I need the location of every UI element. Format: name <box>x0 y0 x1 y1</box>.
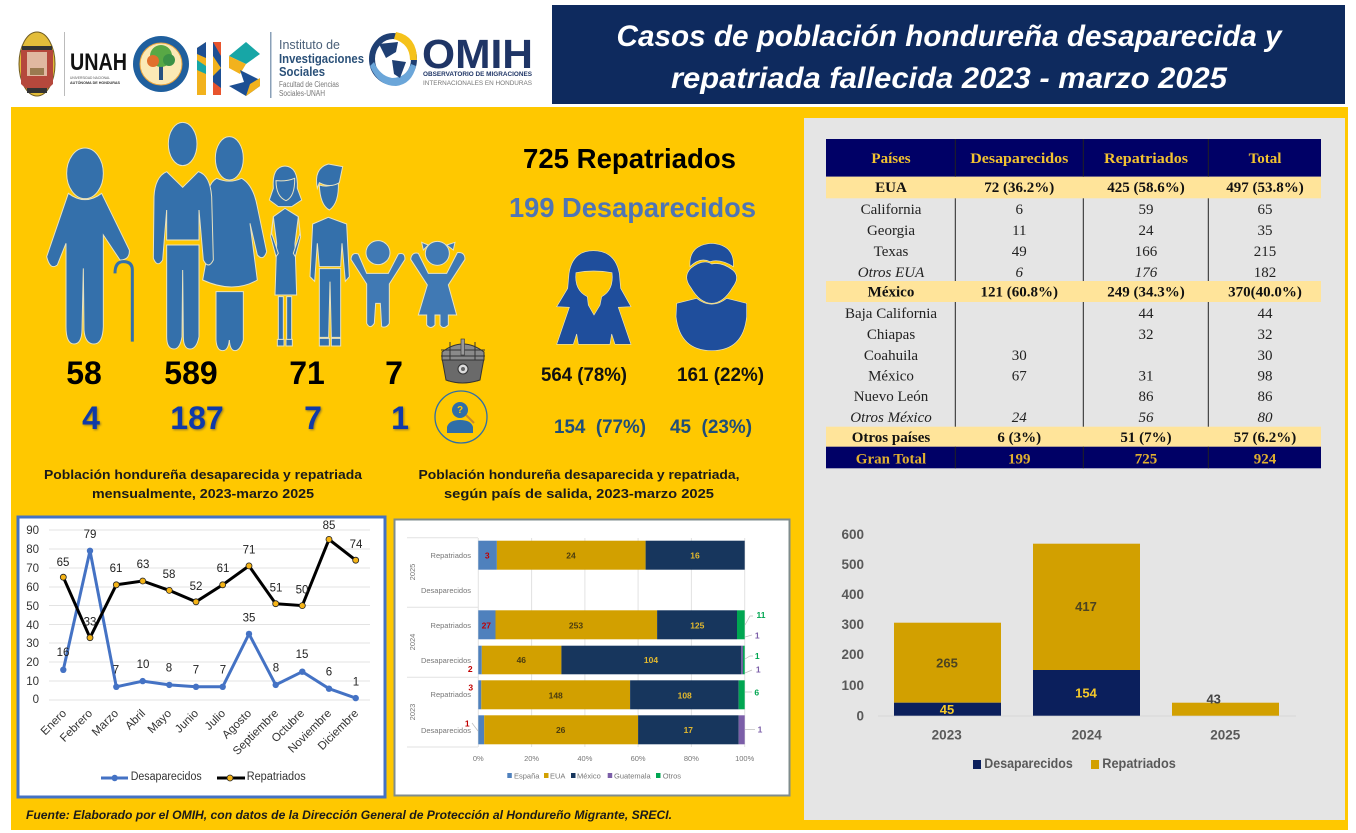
figures: repatriated by sex <box>541 365 764 386</box>
data labels: 10 <box>137 659 149 671</box>
column values: 265 <box>936 656 958 670</box>
rows: US states: Georgia <box>867 223 915 239</box>
legend: Desaparecidos <box>131 771 202 783</box>
rows: US states: 65 <box>1258 202 1272 218</box>
icon: missing person search <box>435 391 487 443</box>
logo: UNAH wordmark: UNAH <box>70 49 127 76</box>
stacked column chart: by year <box>841 527 1296 771</box>
data labels: 8 <box>273 662 279 674</box>
logo: UNAH wordmark: AUTÓNOMA DE HONDURAS <box>70 80 120 85</box>
y axis labels: 600 <box>841 527 864 542</box>
value labels: 26 <box>556 725 566 735</box>
data labels: 8 <box>166 662 172 674</box>
month labels: Mayo <box>146 708 174 736</box>
stacked bar chart: country of departure <box>394 520 790 796</box>
data labels: 6 <box>326 666 332 678</box>
rows: Mexican states: 44 <box>1258 306 1273 322</box>
rows: US states: 166 <box>1135 244 1158 260</box>
series: repatriated <box>60 536 359 641</box>
icon: young woman <box>269 166 302 346</box>
rows: US states: 176 <box>1135 265 1158 281</box>
legend: Otros <box>663 772 681 780</box>
value labels: 16 <box>690 551 700 561</box>
table header: Desaparecidos <box>970 151 1068 167</box>
legend: Guatemala <box>614 772 652 780</box>
line chart: monthly cases <box>18 517 385 797</box>
row: Otros países: 51 (7%) <box>1120 430 1172 446</box>
year labels <box>408 564 417 720</box>
y axis labels: 0 <box>33 694 39 706</box>
column: 2024 <box>1033 544 1140 716</box>
table header <box>871 151 1281 167</box>
panel: gray right panel <box>804 118 1345 820</box>
rows: US states: 24 <box>1138 223 1154 239</box>
title: repatriada fallecida 2023 - marzo 2025 <box>671 62 1228 95</box>
y axis labels: 300 <box>841 617 864 632</box>
row: México: 121 (60.8%) <box>981 284 1058 300</box>
y axis labels: 400 <box>841 587 864 602</box>
heading: monthly chart: Población hondureña desaparecida y repatriada <box>44 468 363 482</box>
data labels: 52 <box>190 581 202 593</box>
data labels: 58 <box>163 569 175 581</box>
bar: desaparecidos 2023 <box>478 715 745 744</box>
rows: US states: 49 <box>1012 244 1027 260</box>
row: EUA <box>875 180 1304 196</box>
icon: young man <box>310 164 349 346</box>
x axis labels <box>932 728 1241 742</box>
percent axis: 60% <box>631 754 646 763</box>
logo: IIS <box>197 42 260 96</box>
y axis labels: 50 <box>26 601 39 613</box>
heading: monthly chart <box>44 468 363 501</box>
logo: Instituto de Investigaciones Sociales <box>279 38 364 98</box>
data labels: 74 <box>350 539 363 551</box>
y axis labels <box>841 527 864 724</box>
icon: woman <box>557 251 631 344</box>
logo: OMIH globe <box>370 32 417 86</box>
category labels: Desaparecidos <box>421 656 471 665</box>
y axis labels: 90 <box>26 525 39 537</box>
icon: adult man <box>153 122 213 349</box>
column: 2023 <box>894 623 1001 716</box>
table header: Repatriados <box>1104 151 1188 167</box>
legend: Repatriados <box>247 771 306 783</box>
value labels: 1 <box>465 719 470 729</box>
category labels: Repatriados <box>431 690 471 699</box>
percent axis <box>473 754 755 763</box>
row: México <box>868 284 1302 300</box>
row: Otros países: 6 (3%) <box>997 430 1041 446</box>
rows: Mexican states: 32 <box>1258 327 1272 343</box>
logo: Instituto de Investigaciones Sociales: Instituto de <box>279 38 340 52</box>
month labels: Abril <box>123 708 148 732</box>
row: México: 370(40.0%) <box>1228 284 1302 300</box>
value labels: 3 <box>485 551 490 561</box>
logo: UNAH wordmark <box>70 49 127 85</box>
value labels: 46 <box>517 655 526 665</box>
logo: Instituto de Investigaciones Sociales: Sociales <box>279 64 325 79</box>
data labels: 7 <box>113 664 119 676</box>
value labels: 1 <box>758 724 763 734</box>
rows: Mexican states <box>845 306 1273 426</box>
month labels: Enero <box>39 708 69 738</box>
rows: Mexican states: 86 <box>1138 389 1154 405</box>
value labels: 3 <box>468 683 473 693</box>
figures: disappeared by age: 7 <box>304 400 322 436</box>
logo: UNAH wordmark: UNIVERSIDAD NACIONAL <box>70 75 111 80</box>
y axis labels: 80 <box>26 544 39 556</box>
figures: disappeared by age: 187 <box>170 400 224 436</box>
figures: repatriated by age: 589 <box>164 355 218 391</box>
rows: US states: 11 <box>1012 223 1027 239</box>
rows: Mexican states: 80 <box>1258 410 1273 426</box>
heading: 199 disappeared: 199 Desaparecidos <box>509 192 756 223</box>
figures: disappeared by age: 1 <box>391 400 409 436</box>
x axis labels: 2023 <box>932 728 962 742</box>
value labels: 108 <box>678 690 692 700</box>
y axis labels: 40 <box>26 620 39 632</box>
value labels: 2 <box>468 664 473 674</box>
figures: disappeared by sex <box>554 417 752 438</box>
rows: US states: 215 <box>1254 244 1276 260</box>
legend: Desaparecidos <box>984 756 1073 771</box>
rows: US states: 6 <box>1016 202 1024 218</box>
heading: 725 repatriated: 725 Repatriados <box>523 143 736 174</box>
month labels: Febrero <box>58 708 95 745</box>
rows: Mexican states: Baja California <box>845 306 937 322</box>
value labels: 27 <box>482 620 491 630</box>
figures: disappeared by age: 4 <box>82 400 100 436</box>
icon: missing person search: ? <box>457 405 463 416</box>
logo: UNAH seal <box>19 32 55 96</box>
y axis labels: 30 <box>26 638 39 650</box>
rows: Mexican states: Nuevo León <box>854 389 929 405</box>
bar: repatriados 2024 <box>478 610 745 639</box>
x axis labels: 2024 <box>1072 728 1102 742</box>
data labels: 51 <box>270 582 282 594</box>
value labels: 125 <box>690 620 705 630</box>
value labels: 6 <box>754 687 759 697</box>
rows: Mexican states: México <box>868 368 914 384</box>
logo: Instituto de Investigaciones Sociales: Facultad de Ciencias <box>279 80 339 89</box>
value labels: 17 <box>684 725 693 735</box>
column values <box>936 599 1221 717</box>
bar: repatriados 2025 <box>478 541 745 570</box>
rows: US states <box>858 202 1276 281</box>
rows: Mexican states: 56 <box>1138 410 1154 426</box>
x axis labels: 2025 <box>1210 728 1241 742</box>
rows: Mexican states: 30 <box>1258 348 1272 364</box>
bar: desaparecidos 2024 <box>478 646 745 674</box>
row: EUA: 497 (53.8%) <box>1226 180 1304 196</box>
series: disappeared <box>60 548 359 701</box>
value labels <box>465 551 766 735</box>
data labels: 1 <box>353 676 359 688</box>
data labels: 35 <box>243 612 255 624</box>
value labels: 1 <box>755 631 760 641</box>
figures: repatriated by sex: 161 (22%) <box>677 365 764 386</box>
data labels: 65 <box>57 557 69 569</box>
rows: Mexican states: 98 <box>1258 368 1272 384</box>
row: Otros países <box>852 430 1296 446</box>
data labels: 7 <box>220 664 226 676</box>
y axis labels: 60 <box>26 582 39 594</box>
month labels: Julio <box>203 708 228 733</box>
month labels: Octubre <box>270 708 307 745</box>
data labels: 7 <box>193 664 199 676</box>
logos header <box>19 31 533 98</box>
y axis labels: 0 <box>856 708 864 724</box>
logo: Instituto de Investigaciones Sociales: Investigaciones <box>279 51 364 66</box>
month labels: Noviembre <box>286 708 334 755</box>
column values: 45 <box>940 702 954 717</box>
figures: repatriated by sex: 564 (78%) <box>541 365 627 386</box>
data labels: 50 <box>296 584 308 596</box>
row: México: México <box>868 284 914 300</box>
rows: Mexican states: 44 <box>1138 306 1154 322</box>
figures: repatriated by age: 58 <box>66 355 102 391</box>
source note: Fuente: Elaborado por el OMIH, con datos de la Dirección General de Protección al Hondureño Migrante, SRECI. <box>26 808 672 822</box>
logo: OMIH wordmark: OBSERVATORIO DE MIGRACIONES <box>423 72 532 78</box>
figures: repatriated by age: 71 <box>289 355 325 391</box>
row: Gran Total: Gran Total <box>856 452 926 468</box>
column values: 154 <box>1075 686 1098 700</box>
legend <box>101 771 306 783</box>
logo: OMIH wordmark: OMIH <box>422 31 533 77</box>
legend: Repatriados <box>1102 756 1176 771</box>
icon: adult woman <box>203 137 267 351</box>
legend: España <box>514 772 540 780</box>
table header: Total <box>1249 151 1281 167</box>
data labels: 71 <box>243 544 255 556</box>
month labels: Marzo <box>90 708 121 739</box>
row: Otros países: 57 (6.2%) <box>1234 430 1296 446</box>
y axis labels: 200 <box>841 647 864 662</box>
data labels: 33 <box>84 616 96 628</box>
category labels: Repatriados <box>431 621 471 630</box>
value labels: 24 <box>566 551 576 561</box>
data labels: 61 <box>110 563 122 575</box>
figures: disappeared by sex: 45 (23%) <box>670 417 752 438</box>
rows: Mexican states: 67 <box>1012 368 1027 384</box>
value labels: 1 <box>755 651 760 661</box>
value labels: 1 <box>756 665 761 675</box>
percent axis: 40% <box>577 754 593 763</box>
rows: US states: 6 <box>1016 265 1024 281</box>
rows: Mexican states: 30 <box>1012 348 1027 364</box>
heading: country chart: Población hondureña desaparecida y repatriada, <box>418 468 740 482</box>
table header: Países <box>871 151 911 167</box>
category labels: Repatriados <box>431 551 471 560</box>
rows: US states: Otros EUA <box>858 265 925 281</box>
data labels: 15 <box>296 649 308 661</box>
rows: US states: 35 <box>1258 223 1272 239</box>
heading: country chart: según país de salida, 2023-marzo 2025 <box>444 487 714 501</box>
bar: repatriados 2023 <box>478 680 745 709</box>
heading: country chart <box>418 468 740 501</box>
y axis labels <box>26 525 39 706</box>
panel: title banner <box>552 5 1345 104</box>
rows: Mexican states: 32 <box>1138 327 1154 343</box>
month labels: Junio <box>173 708 201 736</box>
value labels: 148 <box>549 690 563 700</box>
data labels: 61 <box>217 563 229 575</box>
rows: US states: California <box>861 202 922 218</box>
year labels: 2023 <box>408 704 417 720</box>
year labels: 2025 <box>408 564 417 580</box>
people silhouettes <box>47 122 465 351</box>
title: Casos de población hondureña desaparecida y <box>616 20 1283 53</box>
year labels: 2024 <box>408 634 417 650</box>
icon: girl <box>411 241 465 327</box>
leader lines <box>472 616 755 731</box>
row: Gran Total <box>856 452 1277 468</box>
y axis labels: 20 <box>26 657 39 669</box>
row: Gran Total: 924 <box>1254 452 1277 468</box>
rows: US states: Texas <box>874 244 909 260</box>
legend <box>973 756 1176 771</box>
month labels <box>39 708 361 758</box>
figures: disappeared by age <box>82 400 409 436</box>
rows: US states: 182 <box>1254 265 1276 281</box>
legend <box>507 772 681 780</box>
legend: México <box>577 772 601 780</box>
data labels <box>57 520 363 688</box>
logo: OMIH wordmark: INTERNACIONALES EN HONDURAS <box>423 81 532 87</box>
category labels: Desaparecidos <box>421 726 471 735</box>
icon: funeral basket <box>441 339 485 383</box>
rows: Mexican states: 31 <box>1138 368 1154 384</box>
logo: Instituto de Investigaciones Sociales: Sociales-UNAH <box>279 89 325 98</box>
value labels: 11 <box>756 610 766 620</box>
rows: Mexican states: Chiapas <box>867 327 915 343</box>
rows: US states: 59 <box>1138 202 1154 218</box>
data labels: 85 <box>323 520 335 532</box>
percent axis: 80% <box>684 754 699 763</box>
y axis labels: 500 <box>841 557 864 572</box>
value labels: 104 <box>644 655 658 665</box>
rows: Mexican states: Otros México <box>850 410 932 426</box>
legend: EUA <box>550 772 565 780</box>
icon: elderly person with cane <box>47 148 132 344</box>
row: Gran Total: 725 <box>1135 452 1157 468</box>
row: Otros países: Otros países <box>852 430 930 446</box>
data labels: 16 <box>57 647 69 659</box>
icon: boy <box>351 241 405 327</box>
month labels: Agosto <box>220 708 254 741</box>
data labels: 63 <box>137 559 149 571</box>
column values: 43 <box>1206 692 1221 706</box>
row: EUA: EUA <box>875 180 907 196</box>
percent axis: 0% <box>473 754 484 763</box>
title <box>616 20 1283 95</box>
icon: man <box>676 243 747 351</box>
rows: Mexican states: 24 <box>1012 410 1027 426</box>
row: Gran Total: 199 <box>1008 452 1031 468</box>
column values: 417 <box>1075 599 1097 614</box>
logo: Facultad de Ciencias Sociales <box>133 36 189 92</box>
percent axis: 20% <box>524 754 539 763</box>
figures: repatriated by age <box>66 355 403 391</box>
y axis labels: 10 <box>26 676 39 688</box>
category labels <box>421 551 471 735</box>
table: cases by country <box>826 139 1321 468</box>
percent axis: 100% <box>735 754 755 763</box>
column: 2025 <box>1172 703 1279 716</box>
rows: Mexican states: Coahuila <box>864 348 918 364</box>
figures: repatriated by age: 7 <box>385 355 403 391</box>
value labels: 253 <box>569 620 583 630</box>
month labels: Diciembre <box>316 708 361 753</box>
month labels: Septiembre <box>231 708 281 758</box>
row: EUA: 425 (58.6%) <box>1107 180 1185 196</box>
rows: Mexican states: 86 <box>1258 389 1273 405</box>
y axis labels: 100 <box>841 678 864 693</box>
y axis labels: 70 <box>26 563 39 575</box>
category labels: Desaparecidos <box>421 586 471 595</box>
figures: disappeared by sex: 154 (77%) <box>554 417 646 438</box>
row: México: 249 (34.3%) <box>1107 284 1185 300</box>
row: EUA: 72 (36.2%) <box>984 180 1054 196</box>
heading: monthly chart: mensualmente, 2023-marzo 2025 <box>92 487 314 501</box>
data labels: 79 <box>84 529 96 541</box>
